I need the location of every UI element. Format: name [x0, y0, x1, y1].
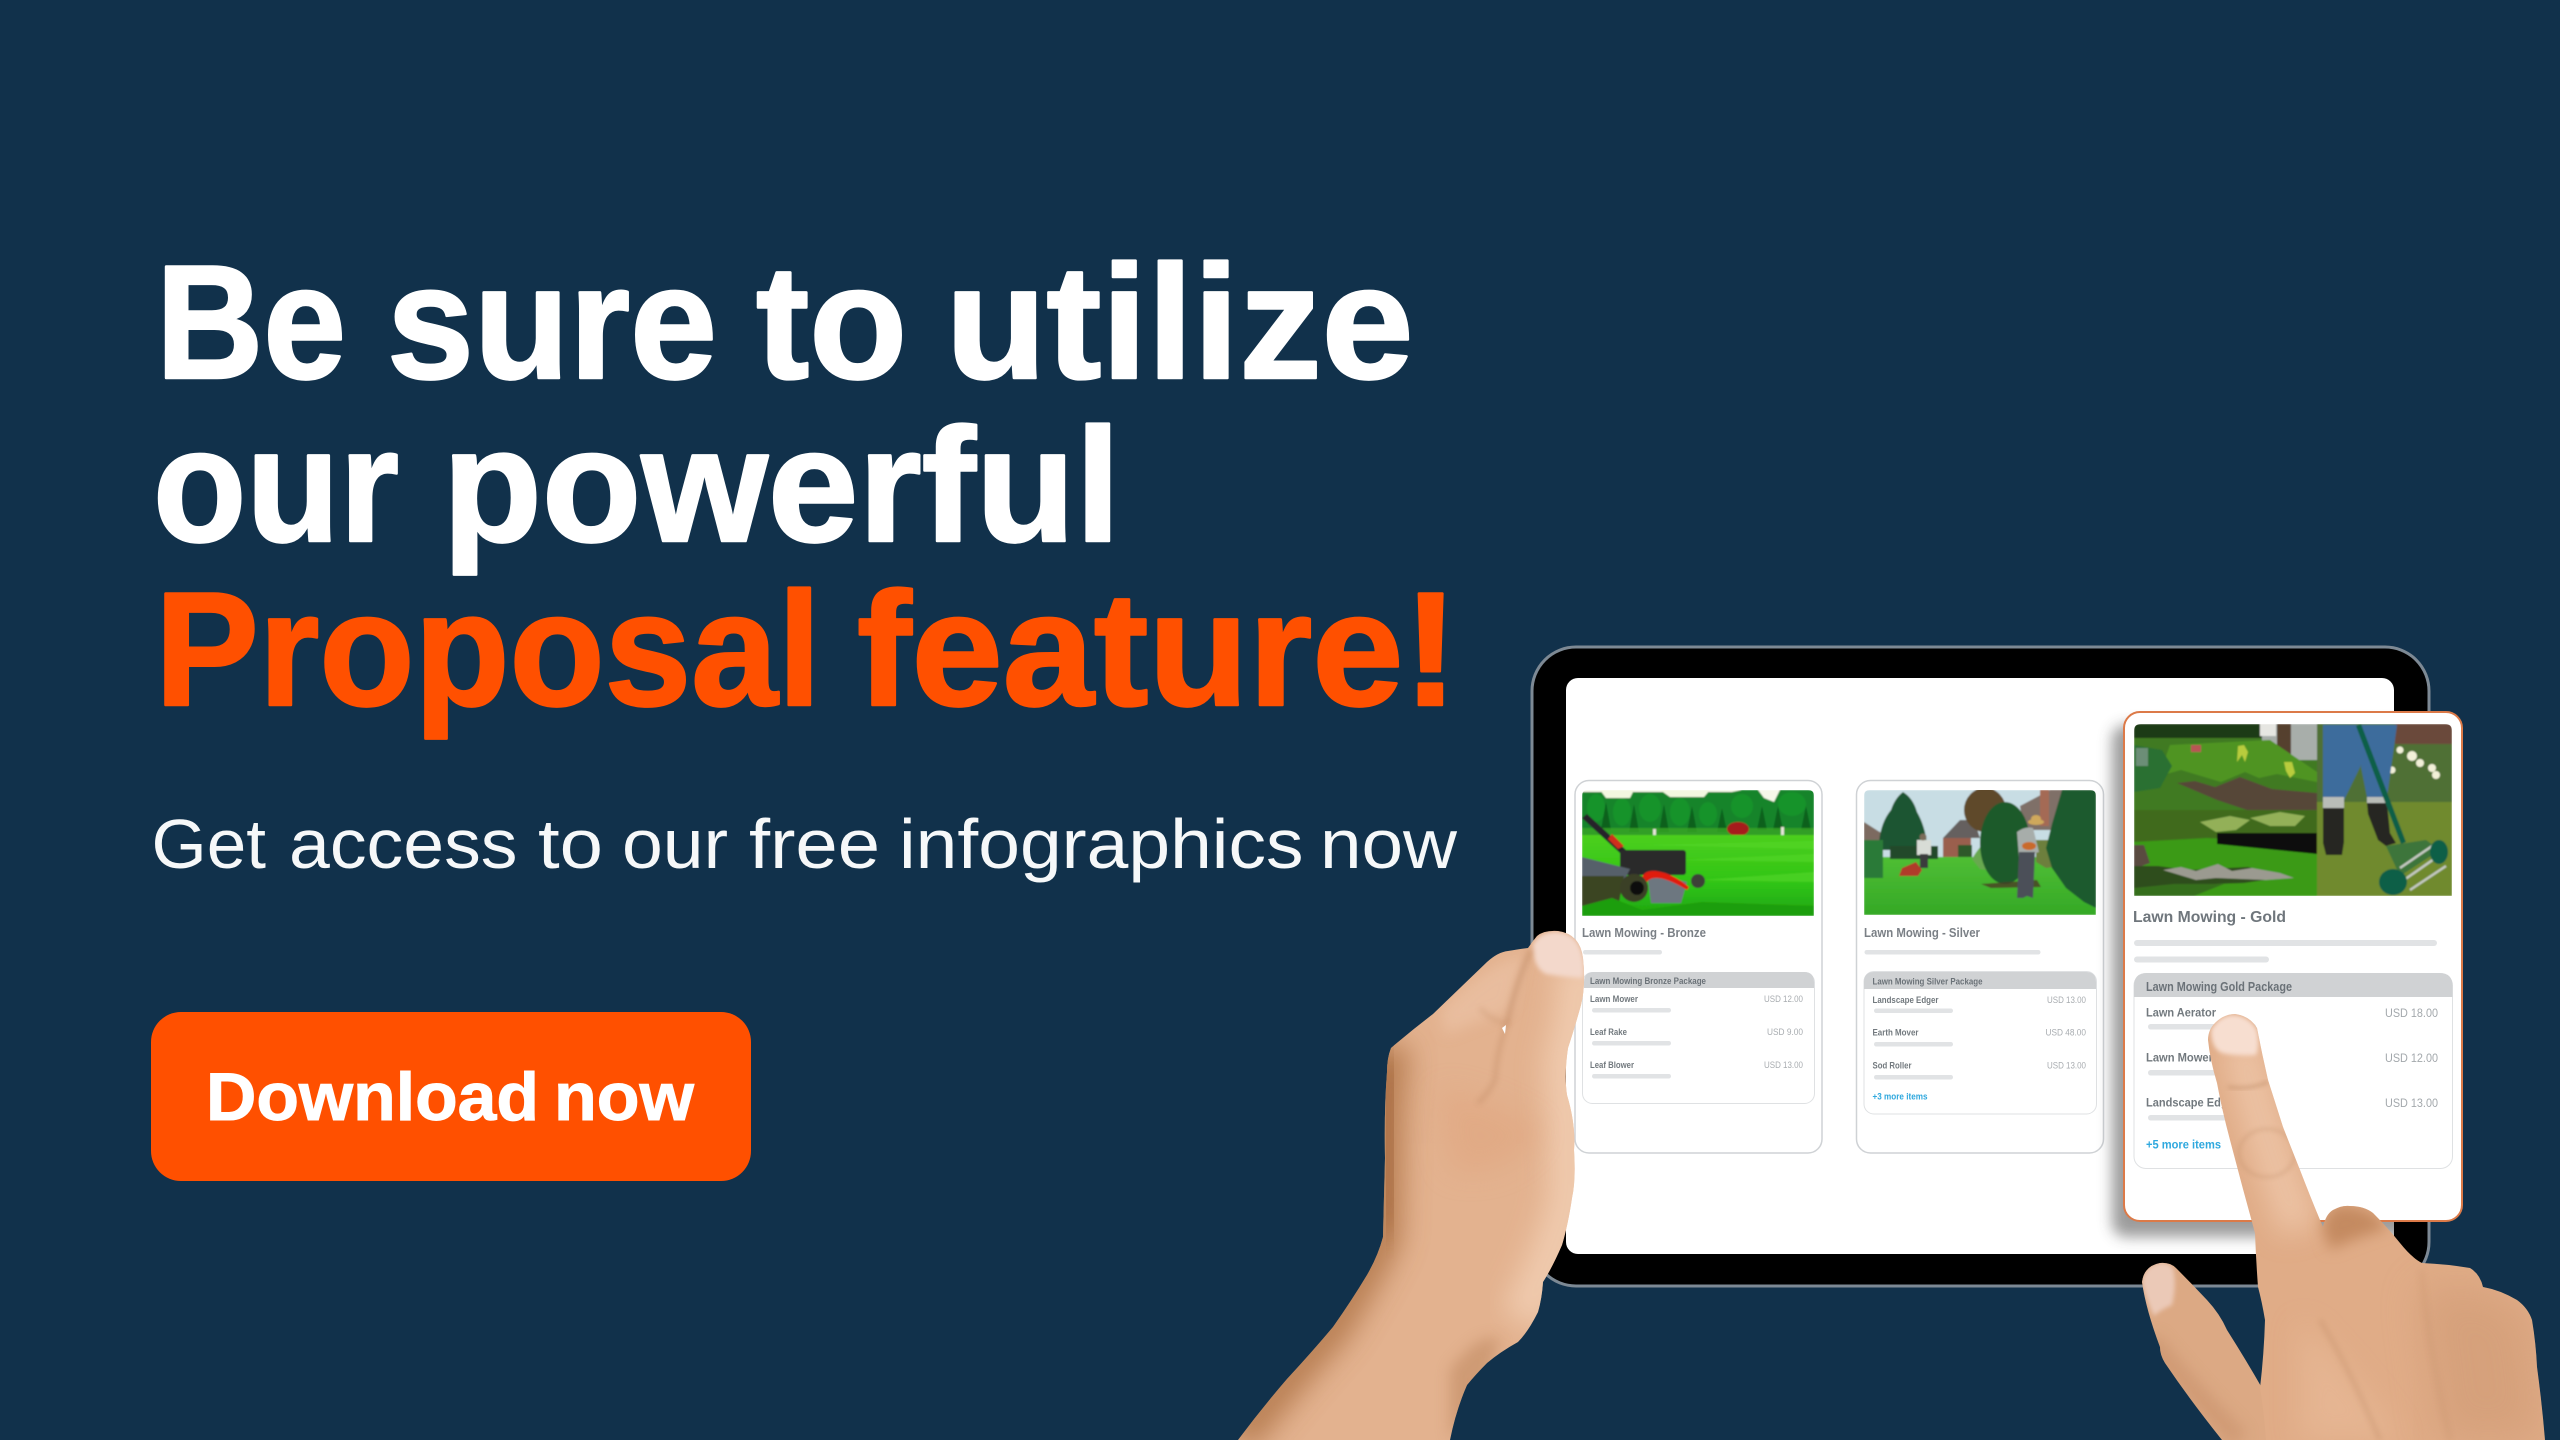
- thumb nail: [1533, 932, 1584, 978]
- item row: earth mover: [1872, 1028, 2086, 1046]
- title: feature!: [857, 559, 1458, 740]
- subtitle: now: [1320, 805, 1457, 883]
- description placeholder: [2134, 940, 2437, 962]
- item row: earth mover: Earth Mover: [1872, 1028, 1919, 1038]
- item row: leaf blower: [1590, 1060, 1803, 1078]
- package: gold: [2134, 973, 2452, 1168]
- package: gold: Lawn Mowing Gold Package: [2146, 980, 2292, 994]
- subtitle: free: [749, 805, 880, 883]
- item row: landscape edger: Landscape Edger: [2146, 1096, 2238, 1110]
- item row: earth mover: USD 48.00: [2046, 1028, 2086, 1038]
- title: Proposal: [155, 559, 821, 740]
- card: gold: [2124, 712, 2462, 1221]
- package: bronze: Lawn Mowing Bronze Package: [1590, 976, 1706, 987]
- item row: lawn mower: USD 12.00: [2385, 1051, 2438, 1065]
- item row: landscape edger: [1872, 995, 2086, 1013]
- item row: lawn aerator: Lawn Aerator: [2146, 1006, 2216, 1020]
- tablet screen: [1566, 678, 2394, 1254]
- item row: lawn aerator: [2146, 1006, 2438, 1030]
- download button: [151, 1012, 751, 1181]
- description placeholder: [1583, 950, 1662, 954]
- item row: lawn mower: Lawn Mower: [1590, 994, 1638, 1004]
- item row: leaf rake: [1590, 1027, 1803, 1046]
- download button: now: [554, 1059, 695, 1135]
- subtitle: to: [538, 805, 603, 883]
- photo: gardeners mowing and trimming: [1864, 788, 2096, 915]
- thumb: [2142, 1262, 2266, 1440]
- item row: lawn mower: Lawn Mower: [2146, 1050, 2213, 1064]
- item row: lawn mower: USD 12.00: [1764, 994, 1803, 1004]
- item row: landscape edger: USD 13.00: [2385, 1096, 2438, 1110]
- title: to: [756, 232, 907, 413]
- title: gold: Lawn Mowing - Gold: [2133, 909, 2286, 926]
- download button: Download: [206, 1059, 539, 1135]
- title: [153, 232, 1458, 740]
- item row: lawn mower: [2146, 1050, 2438, 1076]
- item row: leaf blower: Leaf Blower: [1590, 1060, 1634, 1070]
- title: our: [153, 395, 399, 576]
- title: sure: [387, 232, 717, 413]
- item row: sod roller: USD 13.00: [2047, 1060, 2086, 1070]
- index nail: [2211, 1015, 2258, 1055]
- subtitle: our: [622, 805, 728, 883]
- hand and index finger: [2200, 1010, 2550, 1440]
- item row: lawn aerator: USD 18.00: [2385, 1006, 2438, 1020]
- description placeholder: [1864, 950, 2040, 954]
- title: Be: [156, 232, 346, 413]
- item row: landscape edger: [2146, 1096, 2438, 1120]
- item row: leaf blower: USD 13.00: [1764, 1060, 1803, 1070]
- title: utilize: [946, 232, 1414, 413]
- card: bronze: [1575, 780, 1822, 1153]
- package: bronze: [1582, 972, 1814, 1104]
- left hand holding tablet: [1230, 925, 1590, 1440]
- right hand pointing: [2130, 1010, 2550, 1440]
- more items link: gold: +5 more items: [2146, 1138, 2221, 1152]
- photo: sod laying and lawn aerator: [2134, 724, 2452, 896]
- tablet: [1532, 647, 2429, 1286]
- package: silver: [1864, 972, 2096, 1114]
- subtitle: Get: [152, 805, 266, 883]
- title: bronze: Lawn Mowing - Bronze: [1582, 926, 1706, 940]
- photo: lawn mower on grass: [1582, 790, 1814, 916]
- item row: landscape edger: Landscape Edger: [1872, 995, 1939, 1005]
- item row: sod roller: [1872, 1060, 2086, 1080]
- thumb and finger creases: [1478, 950, 1531, 1103]
- more items link: silver: +3 more items: [1872, 1092, 1928, 1102]
- title: silver: Lawn Mowing - Silver: [1864, 926, 1980, 940]
- title: powerful: [442, 395, 1120, 576]
- item row: landscape edger: USD 13.00: [2047, 995, 2086, 1005]
- package: silver: Lawn Mowing Silver Package: [1872, 976, 1982, 988]
- item row: leaf rake: Leaf Rake: [1590, 1027, 1627, 1037]
- item row: lawn mower: [1590, 994, 1803, 1012]
- item row: sod roller: Sod Roller: [1872, 1060, 1912, 1070]
- subtitle: infographics: [899, 805, 1304, 883]
- card: silver: [1856, 780, 2104, 1153]
- card shadow: [2102, 716, 2394, 1246]
- item row: leaf rake: USD 9.00: [1767, 1027, 1803, 1037]
- subtitle: [152, 805, 1457, 883]
- subtitle: access: [289, 805, 518, 883]
- thumb nail: [2142, 1263, 2175, 1316]
